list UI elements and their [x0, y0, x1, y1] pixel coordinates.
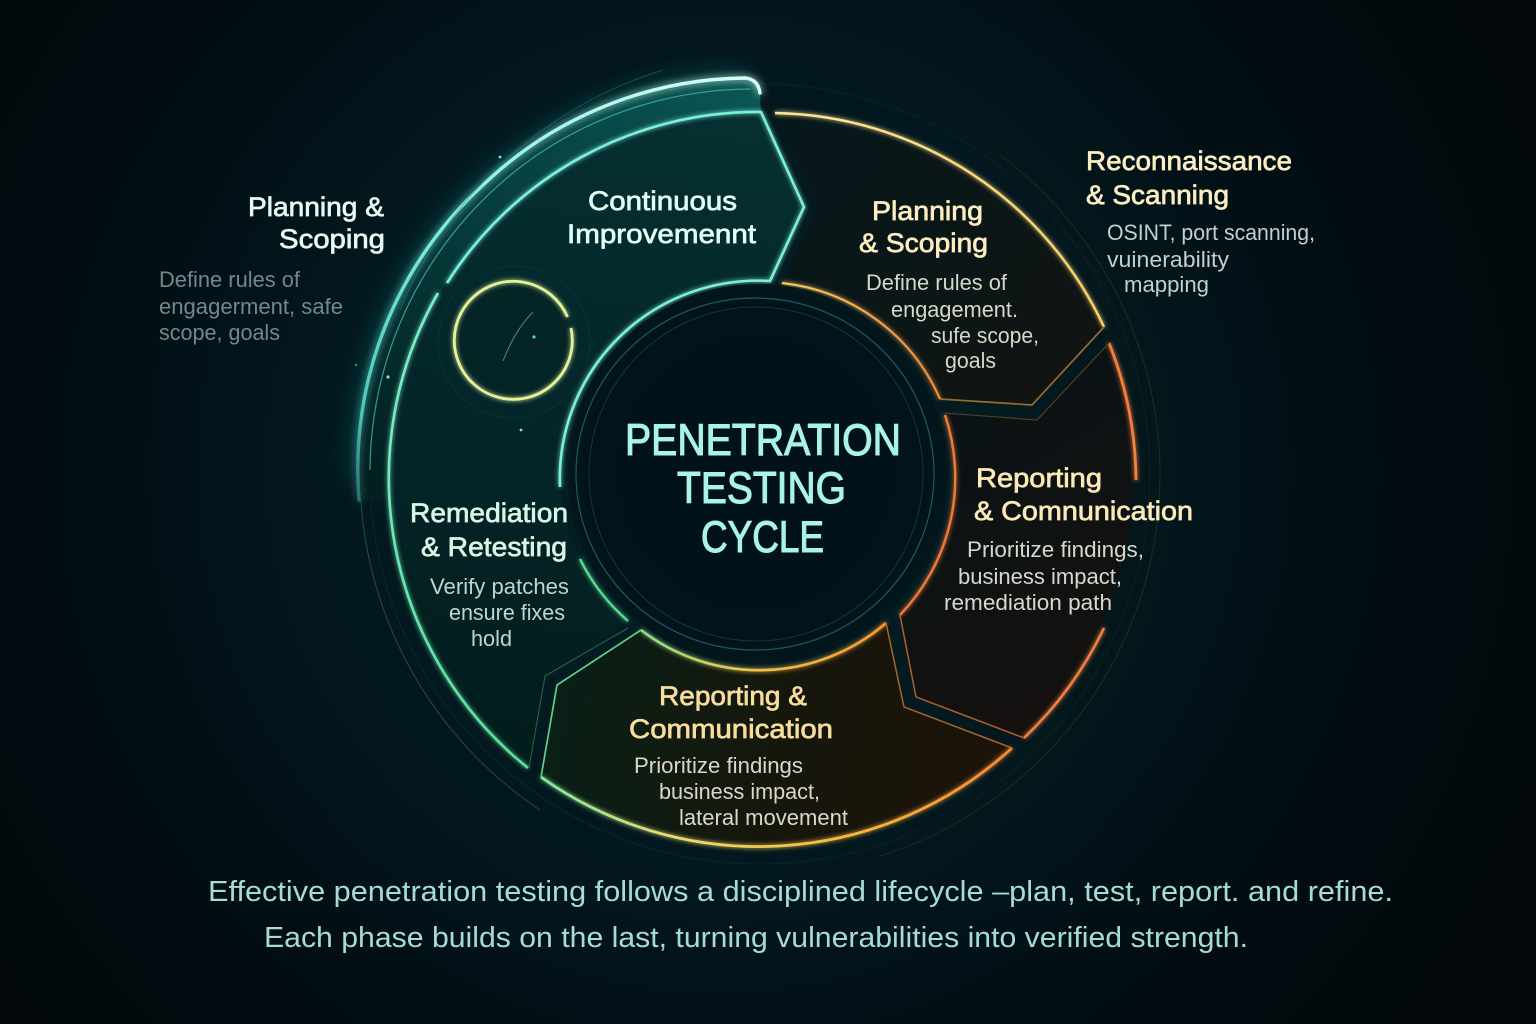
- text: reconnaissance and scanning: [1086, 146, 1315, 297]
- description: [634, 753, 848, 830]
- description: engagement.: [891, 297, 1018, 322]
- heading: [248, 192, 385, 254]
- description: ensure fixes: [449, 600, 565, 625]
- text: planning and scoping segment: [859, 196, 1039, 373]
- text: left planning and scoping: [159, 192, 385, 345]
- thin parallel teal arc: [370, 89, 750, 470]
- footer caption: [208, 876, 1393, 954]
- description: [159, 267, 343, 345]
- text: reporting right segment: [944, 463, 1193, 615]
- heading: Planning: [872, 196, 983, 226]
- heading: [410, 498, 568, 562]
- description: business impact,: [958, 564, 1122, 589]
- heading: Remediation: [410, 498, 568, 528]
- teal band halo: [359, 78, 747, 480]
- description: remediation path: [944, 590, 1112, 615]
- heading: Scoping: [279, 224, 385, 254]
- footer caption: Each phase builds on the last, turning vulnerabilities into verified strength.: [264, 922, 1248, 954]
- text: continuous improvement: Improvemennt: [567, 219, 757, 249]
- footer caption: Effective penetration testing follows a disciplined lifecycle –plan, test, report. and refine.: [208, 876, 1393, 908]
- description: scope, goals: [159, 320, 280, 345]
- faint outer rings: [360, 84, 1160, 864]
- description: Define rules of: [159, 267, 301, 292]
- heading: & Comnunication: [974, 496, 1193, 526]
- teal band fill: [358, 78, 761, 500]
- panel: central hub: [568, 284, 948, 664]
- text: reporting bottom segment: [629, 681, 848, 830]
- remediation outer arc: [389, 293, 528, 768]
- description: Verify patches: [430, 574, 569, 599]
- remediation faint edge: [529, 628, 628, 768]
- remediation inner arc: [580, 559, 628, 621]
- description: hold: [471, 626, 512, 651]
- title: [625, 416, 901, 562]
- description: Prioritize findings: [634, 753, 803, 778]
- description: [1107, 220, 1315, 297]
- continuous improvement outline: [447, 112, 804, 487]
- description: [944, 537, 1144, 615]
- heading: & Scanning: [1086, 180, 1229, 210]
- small sparks: [355, 156, 522, 431]
- description: sufe scope,: [931, 323, 1039, 348]
- description: business impact,: [659, 779, 820, 804]
- icon: glowing ring: [438, 266, 590, 418]
- outer glowing teal arc: [358, 78, 760, 500]
- title: TESTING: [677, 464, 846, 513]
- heading: Communication: [629, 714, 833, 744]
- description: [430, 574, 569, 651]
- heading: [974, 463, 1193, 526]
- text: remediation and retesting: [410, 498, 569, 651]
- panel: reporting segment bottom: [541, 623, 1012, 847]
- description: engagerment, safe: [159, 294, 343, 319]
- description: Prioritize findings,: [967, 537, 1144, 562]
- heading: [1086, 146, 1292, 210]
- heading: Reconnaissance: [1086, 146, 1292, 176]
- description: [866, 270, 1039, 373]
- panel: planning and scoping segment: [775, 113, 1104, 405]
- title: CYCLE: [701, 513, 824, 562]
- faint outer line: [400, 70, 663, 310]
- title: PENETRATION: [625, 416, 901, 465]
- description: lateral movement: [679, 805, 848, 830]
- heading: Planning &: [248, 192, 384, 222]
- description: vuinerability: [1107, 247, 1229, 272]
- heading: Reporting: [976, 463, 1102, 493]
- description: Define rules of: [866, 270, 1008, 295]
- segment fill: [388, 112, 804, 768]
- heading: [859, 196, 988, 258]
- description: goals: [945, 348, 996, 373]
- description: mapping: [1124, 272, 1209, 297]
- heading: & Retesting: [421, 532, 567, 562]
- panel: continuous improvement and remediation band: [355, 70, 804, 768]
- text: continuous improvement: [567, 186, 757, 249]
- heading: & Scoping: [859, 228, 988, 258]
- text: continuous improvement: Continuous: [588, 186, 737, 216]
- heading: [629, 681, 833, 744]
- heading: Reporting &: [659, 681, 807, 711]
- description: OSINT, port scanning,: [1107, 220, 1315, 245]
- panel: reporting segment right: [900, 343, 1136, 738]
